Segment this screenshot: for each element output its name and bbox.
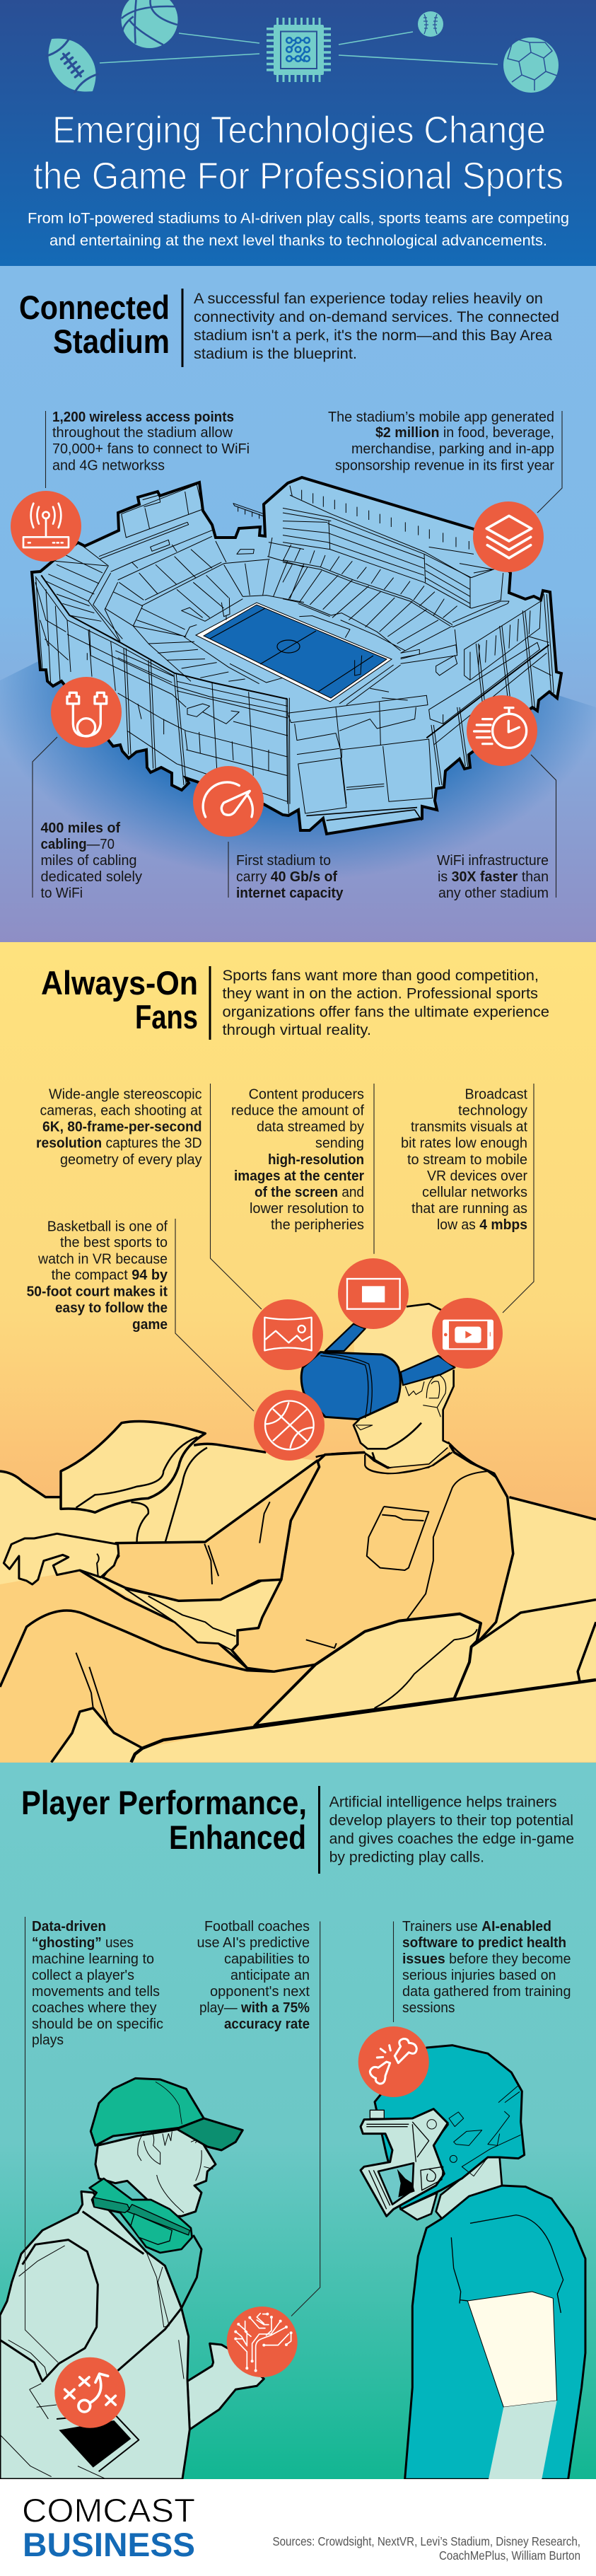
intro paragraph: stadium isn't a perk, it's the norm—and this Bay Area xyxy=(194,327,552,344)
coach scarf xyxy=(90,2178,192,2253)
coach cap xyxy=(90,2078,243,2150)
callout: content producers: high-resolution xyxy=(268,1152,364,1168)
callout: cabling: dedicated solely xyxy=(41,869,142,885)
intro paragraph xyxy=(329,1794,574,1866)
icon: router xyxy=(11,491,81,562)
callout: predictive play calling: Football coaches xyxy=(204,1919,310,1934)
callout: broadcast technology: cellular networks xyxy=(422,1185,527,1200)
icon: basketball xyxy=(254,1390,325,1461)
panel: footer xyxy=(0,2479,596,2576)
callout: internet capacity: internet capacity xyxy=(236,886,344,901)
callout: content producers: data streamed by xyxy=(257,1119,364,1135)
callout: broadcast technology: low as 4 mbps xyxy=(437,1217,527,1233)
heading: Player Performance, Enhanced xyxy=(21,1784,307,1856)
heading: Always-On Fans: Always-On xyxy=(41,964,198,1002)
callout: mobile app revenue: sponsorship revenue in its first year xyxy=(335,458,554,474)
callout: wireless access points: 1,200 wireless access points xyxy=(52,410,234,425)
callout: content producers: of the screen and xyxy=(255,1185,364,1200)
sources xyxy=(273,2534,580,2563)
callout: mobile app revenue: The stadium’s mobile app generated xyxy=(328,410,554,425)
callout: mobile app revenue: merchandise, parking and in-app xyxy=(351,441,554,457)
icon: stopwatch xyxy=(467,695,537,766)
callout: cabling: to WiFi xyxy=(41,886,83,901)
icon: microchip xyxy=(267,18,331,82)
callout: health prediction: issues before they become xyxy=(402,1951,571,1967)
heading: Player Performance, Enhanced: Enhanced xyxy=(169,1818,306,1856)
callout: cabling: 400 miles of xyxy=(41,820,120,836)
callout: health prediction: Trainers use AI-enabled xyxy=(402,1919,551,1934)
icon: wide screen xyxy=(338,1258,409,1329)
header background xyxy=(0,0,596,266)
coach linework xyxy=(0,2212,201,2381)
icon: baseball xyxy=(418,11,443,37)
callout lines xyxy=(33,411,562,898)
intro paragraph: stadium is the blueprint. xyxy=(194,345,357,362)
callout: health prediction: serious injuries based on xyxy=(402,1968,556,1983)
callout: content producers: images at the center xyxy=(234,1168,364,1184)
callout: ghosting: movements and tells xyxy=(32,1984,160,2000)
callout: health prediction: sessions xyxy=(402,2000,455,2016)
callout: basketball in VR: easy to follow the xyxy=(55,1301,168,1316)
callout: predictive play calling: anticipate an xyxy=(230,1968,310,1983)
heading: Always-On Fans xyxy=(41,964,198,1035)
title: Emerging Technologies Change xyxy=(52,109,546,151)
stadium linework right xyxy=(283,486,554,820)
illustration: stadium xyxy=(32,477,561,834)
icon: football xyxy=(36,27,108,103)
intro paragraph: and gives coaches the edge in-game xyxy=(329,1831,574,1847)
intro paragraph: through virtual reality. xyxy=(222,1021,371,1038)
illustration: fan on couch xyxy=(0,1304,596,1763)
icon: layers xyxy=(473,501,544,572)
callout: WiFi speed: is 30X faster than xyxy=(438,869,549,885)
coach arm and hand xyxy=(187,2343,264,2430)
callout: wireless access points: 70,000+ fans to connect to WiFi xyxy=(52,441,250,457)
icon: circuit brain xyxy=(227,2307,298,2377)
panel: player performance xyxy=(0,1763,596,2479)
callout: wireless access points: and 4G networkss xyxy=(52,458,165,474)
intro paragraph: by predicting play calls. xyxy=(329,1849,484,1866)
callout: content producers xyxy=(231,1086,364,1233)
icon: bone xyxy=(358,2026,429,2097)
callout: predictive play calling xyxy=(197,1919,310,2032)
callout: cabling: miles of cabling xyxy=(41,853,137,869)
callout: broadcast technology: that are running as xyxy=(411,1201,527,1217)
head with VR headset xyxy=(301,1304,497,1478)
callout: predictive play calling: play— with a 75% xyxy=(199,2000,310,2016)
callout: broadcast technology: Broadcast xyxy=(465,1086,527,1102)
subtitle: and entertaining at the next level thanks to technological advancements. xyxy=(49,232,547,249)
icon: soccer ball xyxy=(503,37,559,93)
intro paragraph: develop players to their top potential xyxy=(329,1812,573,1829)
heading divider xyxy=(209,966,211,1040)
stadium linework left xyxy=(35,485,304,813)
intro paragraph: Sports fans want more than good competition, xyxy=(222,967,539,984)
callout: broadcast technology: bit rates low enough xyxy=(401,1136,527,1151)
intro paragraph xyxy=(194,290,559,362)
callout: ghosting: Data-driven xyxy=(32,1919,106,1934)
callout lines xyxy=(175,1084,534,1411)
helmet face mask xyxy=(361,2109,448,2216)
callout: ghosting: should be on specific xyxy=(32,2017,163,2032)
callout: basketball in VR: game xyxy=(132,1317,168,1333)
icon: panoramic image xyxy=(252,1299,323,1370)
callout: broadcast technology: transmits visuals at xyxy=(411,1119,527,1135)
callout: content producers: the peripheries xyxy=(271,1217,364,1233)
callout: health prediction xyxy=(402,1919,571,2016)
icon: speed gauge xyxy=(193,766,264,837)
icon: play diagram xyxy=(54,2357,125,2428)
panel: header xyxy=(0,0,596,266)
callout: cabling xyxy=(41,820,142,901)
callout: predictive play calling: accuracy rate xyxy=(224,2017,310,2032)
callout: broadcast technology: technology xyxy=(458,1103,527,1119)
callout: stereoscopic cameras: cameras, each shooting at xyxy=(40,1103,202,1119)
player neck xyxy=(436,2157,502,2219)
callout: mobile app revenue xyxy=(328,410,554,474)
callout: mobile app revenue: $2 million in food, beverage, xyxy=(375,425,554,441)
subtitle: From IoT-powered stadiums to AI-driven play calls, sports teams are competing xyxy=(28,209,569,226)
panel: connected stadium xyxy=(0,266,596,942)
callout: content producers: sending xyxy=(315,1136,364,1151)
panel: always-on fans xyxy=(0,942,596,1763)
callout: broadcast technology xyxy=(401,1086,527,1233)
icon: mobile video xyxy=(432,1298,503,1369)
callout: wireless access points: throughout the stadium allow xyxy=(52,425,233,441)
callout: basketball in VR: the compact 94 by xyxy=(52,1267,168,1283)
section background xyxy=(0,266,596,942)
couch and body xyxy=(0,1420,596,1763)
intro paragraph: they want in on the action. Professional sports xyxy=(222,985,538,1002)
callout: WiFi speed: any other stadium xyxy=(438,886,549,901)
callout: stereoscopic cameras: 6K, 80-frame-per-second xyxy=(42,1119,202,1135)
callout: WiFi speed: WiFi infrastructure xyxy=(437,853,549,869)
phone in pocket xyxy=(0,2414,139,2479)
callout: ghosting: plays xyxy=(32,2033,64,2048)
player helmet xyxy=(375,2046,525,2209)
callout: ghosting: coaches where they xyxy=(32,2000,157,2016)
logo: Comcast Business: BUSINESS xyxy=(23,2526,195,2563)
callout: ghosting xyxy=(32,1919,163,2048)
callout: health prediction: data gathered from training xyxy=(402,1984,571,2000)
coach head xyxy=(95,2129,216,2216)
title: the Game For Professional Sports xyxy=(33,155,563,197)
callout: content producers: lower resolution to xyxy=(250,1201,364,1217)
illustration: coach xyxy=(0,2078,264,2479)
heading divider xyxy=(318,1786,320,1874)
footer background xyxy=(0,2479,596,2576)
callout: content producers: Content producers xyxy=(249,1086,364,1102)
helmet details xyxy=(433,2085,521,2176)
callout: ghosting: “ghosting” uses xyxy=(32,1935,134,1951)
intro paragraph xyxy=(222,967,549,1038)
callout: predictive play calling: capabilities to xyxy=(224,1951,310,1967)
heading: Connected Stadium: Stadium xyxy=(53,323,170,360)
player jersey xyxy=(405,2186,585,2479)
intro paragraph: Artificial intelligence helps trainers xyxy=(329,1794,557,1811)
callout: cabling: cabling—70 xyxy=(41,837,115,852)
connector lines between sports balls and chip xyxy=(100,32,498,64)
callout: stereoscopic cameras: Wide-angle stereoscopic xyxy=(49,1086,202,1102)
callout: predictive play calling: opponent's next xyxy=(210,1984,310,2000)
callout: internet capacity: First stadium to xyxy=(236,853,331,869)
heading: Always-On Fans: Fans xyxy=(135,998,198,1035)
callout: internet capacity xyxy=(236,853,344,901)
stadium silhouette xyxy=(32,477,561,834)
player cream sleeve xyxy=(467,2292,557,2407)
jersey folds xyxy=(451,2215,563,2313)
callout lines xyxy=(25,1917,393,2362)
player lower arm xyxy=(489,2401,557,2479)
coach body xyxy=(0,2191,189,2479)
icon: network cable xyxy=(51,677,122,748)
callout: ghosting: collect a player's xyxy=(32,1968,134,1983)
logo: Comcast Business xyxy=(22,2492,195,2563)
callout: basketball in VR xyxy=(27,1219,168,1333)
intro paragraph: A successful fan experience today relies heavily on xyxy=(194,290,543,307)
icon: basketball xyxy=(122,0,178,48)
callout: predictive play calling: use AI's predictive xyxy=(197,1935,310,1951)
playing field xyxy=(196,603,392,702)
heading: Connected Stadium xyxy=(19,289,170,360)
section background xyxy=(0,1763,596,2479)
logo: Comcast Business: COMCAST xyxy=(22,2492,195,2529)
callout: broadcast technology: VR devices over xyxy=(427,1168,527,1184)
callout: stereoscopic cameras: geometry of every play xyxy=(60,1152,202,1168)
callout: basketball in VR: watch in VR because xyxy=(37,1252,168,1267)
intro paragraph: organizations offer fans the ultimate experience xyxy=(222,1003,549,1020)
heading: Connected Stadium: Connected xyxy=(19,289,170,326)
callout: stereoscopic cameras xyxy=(36,1086,202,1168)
callout: stereoscopic cameras: resolution captures the 3D xyxy=(36,1136,202,1151)
illustration: football player xyxy=(361,2046,585,2479)
callout: ghosting: machine learning to xyxy=(32,1951,154,1967)
title xyxy=(33,109,563,197)
callout: wireless access points xyxy=(52,410,250,474)
callout: internet capacity: carry 40 Gb/s of xyxy=(236,869,337,885)
heading: Player Performance, Enhanced: Player Performance, xyxy=(21,1784,307,1821)
callout: health prediction: software to predict health xyxy=(402,1935,566,1951)
glow behind stadium xyxy=(0,661,594,874)
heading divider xyxy=(181,289,184,367)
section background xyxy=(0,942,596,1763)
callout: WiFi speed xyxy=(437,853,549,901)
intro paragraph: connectivity and on-demand services. The connected xyxy=(194,308,559,325)
subtitle xyxy=(28,209,569,249)
callout: basketball in VR: Basketball is one of xyxy=(47,1219,168,1235)
callout: content producers: reduce the amount of xyxy=(231,1103,364,1119)
callout: basketball in VR: 50-foot court makes it xyxy=(27,1284,168,1300)
callout: broadcast technology: to stream to mobile xyxy=(407,1152,527,1168)
player jaw xyxy=(401,2193,437,2220)
callout: basketball in VR: the best sports to xyxy=(60,1235,168,1251)
